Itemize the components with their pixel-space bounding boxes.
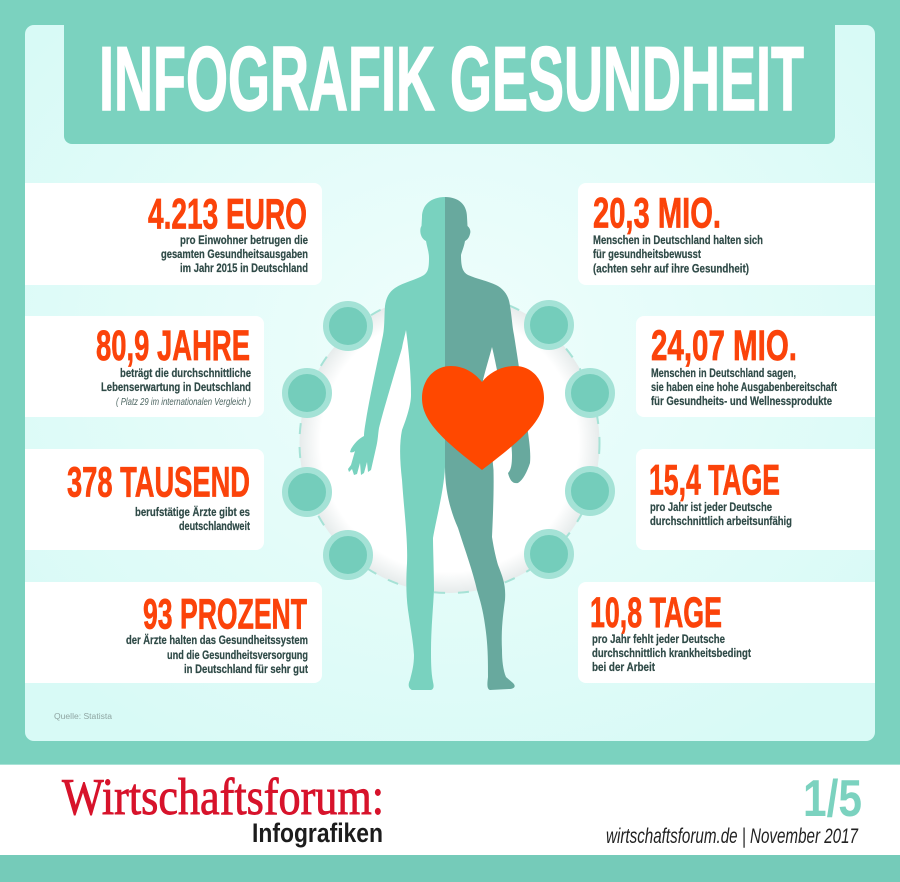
card: 80,9 Jahre: Lebenserwartung in Deutschland <box>101 382 251 394</box>
card: 80,9 Jahre: 80,9 JAHRE <box>96 322 250 370</box>
source note: Quelle: Statista <box>54 712 113 721</box>
logo: Wirtschaftsforum: Wirtschaftsforum: <box>62 769 384 826</box>
card: 24,07 Mio. <box>636 316 875 417</box>
card: 10,8 Tage: 10,8 TAGE <box>590 589 722 637</box>
card: 15,4 Tage: 15,4 TAGE <box>649 456 780 504</box>
card: 20,3 Mio.: (achten sehr auf ihre Gesundheit) <box>593 264 749 276</box>
card: 10,8 Tage: durchschnittlich krankheitsbedingt <box>592 648 751 660</box>
card: 80,9 Jahre <box>25 316 264 417</box>
card: 20,3 Mio.: für gesundheitsbewusst <box>593 249 701 261</box>
card: 378 Tausend: 378 TAUSEND <box>67 458 250 506</box>
card: 378 Tausend: deutschlandweit <box>179 521 250 533</box>
card: 378 Tausend <box>25 449 264 550</box>
circle markers <box>285 303 612 577</box>
card: 4.213 Euro: gesamten Gesundheitsausgaben <box>161 249 308 261</box>
card: 80,9 Jahre: ( Platz 29 im internationalen Vergleich ) <box>116 396 251 408</box>
card: 20,3 Mio.: Menschen in Deutschland halten sich <box>593 235 763 247</box>
card: 93 Prozent: der Ärzte halten das Gesundheitssystem <box>126 634 308 647</box>
card: 93 Prozent: in Deutschland für sehr gut <box>184 664 308 676</box>
card: 24,07 Mio.: sie haben eine hohe Ausgabenbereitschaft <box>651 382 837 394</box>
title banner <box>64 25 835 144</box>
card: 93 Prozent: und die Gesundheitsversorgung <box>167 650 308 662</box>
footer band <box>0 764 900 855</box>
page number: 1/5 <box>803 770 862 828</box>
card: 24,07 Mio.: für Gesundheits- und Wellnessprodukte <box>651 396 832 408</box>
card: 15,4 Tage <box>636 449 875 550</box>
card: 15,4 Tage: pro Jahr ist jeder Deutsche <box>650 502 772 514</box>
body right half <box>445 197 530 690</box>
card: 20,3 Mio.: 20,3 MIO. <box>593 190 721 238</box>
card: 4.213 Euro: pro Einwohner betrugen die <box>180 235 308 247</box>
card: 10,8 Tage: pro Jahr fehlt jeder Deutsche <box>592 634 725 646</box>
heart <box>422 366 544 470</box>
card: 10,8 Tage: bei der Arbeit <box>592 662 655 674</box>
card: 24,07 Mio.: Menschen in Deutschland sagen, <box>651 368 796 380</box>
card: 93 Prozent <box>25 582 322 683</box>
logo subtitle: Infografiken <box>252 818 383 848</box>
card: 10,8 Tage <box>578 582 875 683</box>
body left half <box>348 197 445 690</box>
card: 93 Prozent: 93 PROZENT <box>143 590 307 638</box>
card: 24,07 Mio.: 24,07 MIO. <box>651 322 797 370</box>
card: 20,3 Mio. <box>578 183 875 285</box>
bottom band <box>0 855 900 882</box>
card: 378 Tausend: berufstätige Ärzte gibt es <box>135 506 250 519</box>
main panel <box>25 25 875 741</box>
card: 4.213 Euro <box>25 183 322 285</box>
card: 15,4 Tage: durchschnittlich arbeitsunfähig <box>650 516 792 528</box>
card: 80,9 Jahre: beträgt die durchschnittliche <box>120 368 251 380</box>
card: 4.213 Euro: 4.213 EURO <box>148 190 307 238</box>
card: 4.213 Euro: im Jahr 2015 in Deutschland <box>180 263 308 275</box>
human body figure <box>348 197 530 690</box>
dashed circle backdrop <box>300 293 600 593</box>
